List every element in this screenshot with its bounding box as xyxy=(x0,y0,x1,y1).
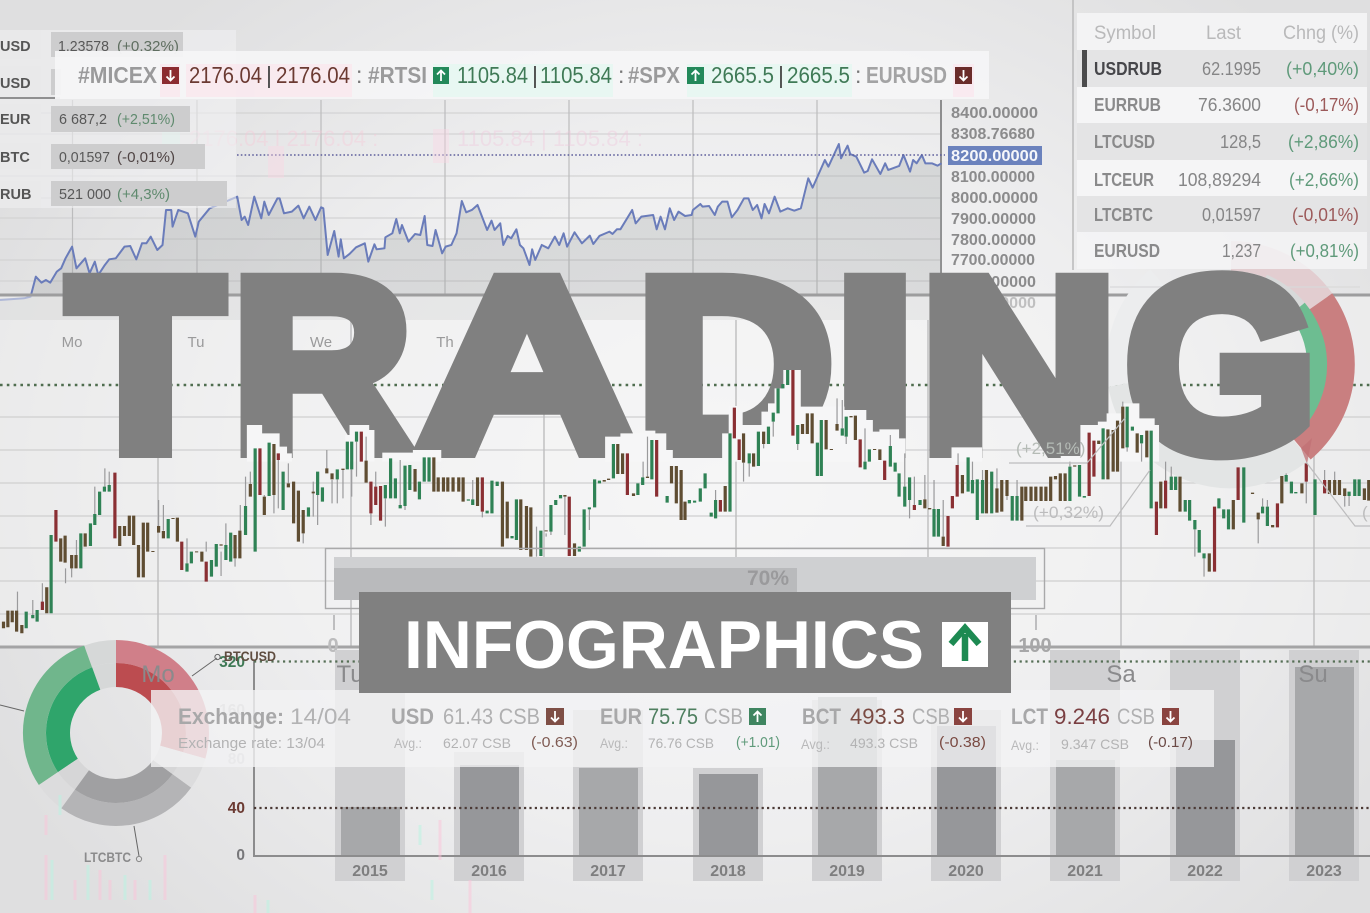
table header: Chng (%) xyxy=(1283,23,1359,44)
panel: ticker bar: | xyxy=(532,62,538,88)
day labels top chart: Mo xyxy=(62,334,82,351)
USD block: 62.07 CSB xyxy=(443,735,511,751)
panel: ticker bar: #SPX xyxy=(628,62,681,88)
panel: left currency labels: 1.23578 xyxy=(58,38,109,55)
panel: symbols table xyxy=(1073,0,1367,270)
table rows: (+2,86%) xyxy=(1288,132,1359,152)
callouts: ( xyxy=(1362,503,1368,522)
candlestick chart xyxy=(3,370,1369,633)
y axis labels top chart: 7500.00000 xyxy=(951,295,1036,312)
y axis labels top chart xyxy=(948,105,1042,312)
year labels: 2020 xyxy=(948,863,984,880)
panel: ticker bar: | xyxy=(778,62,784,88)
EUR block: 76.76 CSB xyxy=(648,735,714,751)
panel: ticker bar: : xyxy=(356,62,362,88)
LCT block: CSB xyxy=(1117,704,1155,729)
table rows: LTCBTC xyxy=(1094,205,1153,225)
year labels: 2023 xyxy=(1306,863,1342,880)
y axis labels top chart: 8400.00000 xyxy=(951,105,1038,122)
white halo behind candles xyxy=(247,370,1159,462)
ghost ticker artifacts xyxy=(162,126,643,178)
ghost ticker artifacts: 1105.84 | 1105.84 : xyxy=(457,126,643,151)
day labels lower chart: Sa xyxy=(1106,661,1136,688)
y axis labels top chart: 7900.00000 xyxy=(951,211,1036,228)
year labels: 2022 xyxy=(1187,863,1223,880)
subtitle box: INFOGRAPHICS xyxy=(359,592,1011,693)
panel: ticker bar: 2176.04 xyxy=(189,62,262,88)
progress bar: 70% xyxy=(747,567,789,590)
panel: exchange strip xyxy=(151,690,1214,767)
panel: left currency labels: USD xyxy=(0,76,31,92)
callouts xyxy=(1009,418,1370,526)
exchange heading: 14/04 xyxy=(290,704,351,729)
title: TRADING: I xyxy=(834,228,916,503)
table rows: (+2,66%) xyxy=(1289,170,1359,190)
donut chart bottom left: LTCBTC xyxy=(84,850,131,865)
y axis labels top chart: 8000.00000 xyxy=(951,190,1038,207)
table rows: LTCUSD xyxy=(1094,132,1155,152)
glitch ticks bottom left xyxy=(46,795,470,913)
panel: left currency labels: BTC xyxy=(0,150,30,166)
panel: left currency labels: (-0,01%) xyxy=(117,149,175,166)
y axis labels: 320 xyxy=(219,654,245,671)
USD block xyxy=(391,704,578,751)
BCT block: Avg.: xyxy=(801,736,830,752)
panel: ticker bar xyxy=(55,51,989,99)
panel: ticker bar: 2176.04 xyxy=(276,62,350,88)
title: TRADING: T xyxy=(68,228,223,503)
y axis labels: 80 xyxy=(228,751,245,768)
highlighted price tag: 8200.00000 xyxy=(951,148,1038,165)
icon: down arrow xyxy=(955,67,972,84)
day labels top chart xyxy=(62,334,454,351)
panel: candlestick chart grid xyxy=(0,295,1370,647)
day labels lower chart: Tu xyxy=(336,661,364,688)
day labels top chart: Tu xyxy=(188,334,204,351)
USD block: 61.43 CSB xyxy=(443,704,540,729)
BCT block: BCT xyxy=(802,704,841,729)
EUR block: EUR xyxy=(600,704,642,729)
progress bar xyxy=(326,548,1052,657)
panel: ticker bar: 2665.5 xyxy=(787,62,850,88)
EUR block: (+1.01) xyxy=(736,734,780,751)
panel: left currency labels xyxy=(0,30,236,208)
panel: ticker bar: : xyxy=(618,62,624,88)
panel: left currency labels: 521 000 xyxy=(59,186,111,203)
title: TRADING: A xyxy=(416,228,638,503)
candles left half xyxy=(3,432,681,633)
year labels: 2016 xyxy=(471,863,507,880)
red arc over G xyxy=(1301,438,1312,464)
year labels: 2017 xyxy=(590,863,626,880)
icon: up arrow xyxy=(433,67,449,84)
LCT block: 9.246 xyxy=(1054,704,1110,729)
bar chart xyxy=(219,650,1370,881)
EUR block xyxy=(600,704,780,751)
panel: ticker bar: #MICEX xyxy=(78,62,158,88)
bar columns xyxy=(335,650,1359,881)
table rows: LTCEUR xyxy=(1094,170,1154,190)
y axis labels top chart: 8308.76680 xyxy=(951,126,1035,143)
LCT block xyxy=(1011,704,1193,753)
pointers xyxy=(0,658,217,856)
year labels xyxy=(352,863,1342,880)
y axis labels: 0 xyxy=(236,847,245,864)
LCT block: 9.347 CSB xyxy=(1061,736,1129,752)
EUR block: 75.75 xyxy=(648,704,698,729)
year labels: 2018 xyxy=(710,863,746,880)
title: TRADING: G xyxy=(1125,228,1317,503)
day labels lower chart: Mo xyxy=(141,661,175,688)
table rows xyxy=(1094,59,1359,261)
table rows: 76.3600 xyxy=(1198,95,1261,115)
y axis labels xyxy=(219,654,245,864)
callouts: (+2,51%) xyxy=(1016,439,1085,458)
icon: up arrow xyxy=(687,67,704,84)
panel: ticker bar: #RTSI xyxy=(368,62,427,88)
BCT block xyxy=(801,704,986,752)
icon: up arrow xyxy=(942,622,988,667)
EUR block: CSB xyxy=(704,704,743,729)
USD block: Avg.: xyxy=(394,735,422,751)
table header: Last xyxy=(1206,23,1242,44)
price line xyxy=(0,144,942,300)
BCT block: 493.3 xyxy=(850,704,905,729)
area under price line xyxy=(0,144,942,320)
y axis labels: 40 xyxy=(228,800,245,817)
table rows: (+0,81%) xyxy=(1290,241,1359,261)
y axis labels top chart: 7700.00000 xyxy=(951,252,1035,269)
panel: ticker bar: 1105.84 xyxy=(457,62,528,88)
table rows: 108,89294 xyxy=(1178,170,1261,190)
subtitle box: INFOGRAPHICS: INFOGRAPHICS xyxy=(404,607,924,683)
day labels lower chart xyxy=(141,661,1328,688)
panel: left currency labels: EUR xyxy=(0,112,31,128)
panel: top line chart xyxy=(0,100,945,320)
year labels: 2015 xyxy=(352,863,388,880)
day labels top chart: We xyxy=(310,334,332,351)
panel: ticker bar: : xyxy=(855,62,861,88)
table rows: EURUSD xyxy=(1094,241,1160,261)
table header: Symbol xyxy=(1094,23,1156,44)
day labels top chart: Th xyxy=(436,334,454,351)
table rows: (-0,17%) xyxy=(1294,95,1359,115)
callouts: (+0,32%) xyxy=(1033,503,1104,522)
y axis labels top chart: 7800.00000 xyxy=(951,232,1036,249)
table rows: 0,01597 xyxy=(1202,205,1261,225)
panel: left currency labels: (+0.32%) xyxy=(117,38,179,55)
title: TRADING: R xyxy=(232,228,412,503)
LCT block: LCT xyxy=(1011,704,1048,729)
candles right half xyxy=(685,370,1369,577)
bars xyxy=(341,667,1354,856)
day labels lower chart: Su xyxy=(1298,661,1328,688)
panel: left currency labels: RUB xyxy=(0,187,31,203)
progress bar: 100 xyxy=(1018,635,1052,657)
EUR block: Avg.: xyxy=(600,735,628,751)
USD block: USD xyxy=(391,704,434,729)
panel: ticker bar: EURUSD xyxy=(866,62,947,88)
table rows: 128,5 xyxy=(1220,132,1261,152)
exchange heading xyxy=(178,704,351,752)
table rows: 1,237 xyxy=(1222,241,1261,261)
donut chart bottom left xyxy=(0,649,276,865)
title: TRADING: N xyxy=(920,228,1118,503)
donut chart bottom left: BTCUSD xyxy=(224,649,276,664)
title: TRADING xyxy=(68,228,1317,503)
panel: ticker bar: | xyxy=(266,62,272,88)
table rows: (-0,01%) xyxy=(1292,205,1359,225)
icon: down arrow xyxy=(162,67,179,84)
panel: left currency labels: USD xyxy=(0,39,31,55)
panel: ticker bar: 1105.84 xyxy=(540,62,612,88)
USD block: (-0.63) xyxy=(531,734,578,751)
BCT block: (-0.38) xyxy=(939,734,986,751)
donut chart top right xyxy=(1110,256,1360,473)
panel: ticker bar: 2665.5 xyxy=(711,62,774,88)
y axis labels top chart: 7600.00000 xyxy=(951,274,1036,291)
panel: left currency labels: (+2,51%) xyxy=(117,111,175,128)
panel: left currency labels: (+4,3%) xyxy=(117,186,170,203)
ghost ticker artifacts: 2176.04 | 2176.04 : xyxy=(189,126,378,151)
LCT block: Avg.: xyxy=(1011,737,1039,753)
BCT block: CSB xyxy=(912,704,950,729)
panel: left currency labels: 6 687,2 xyxy=(59,111,107,128)
title: TRADING: D xyxy=(636,228,834,503)
exchange heading: Exchange: xyxy=(178,704,284,729)
y axis labels: 160 xyxy=(219,702,245,719)
year labels: 2019 xyxy=(829,863,865,880)
table rows: 62.1995 xyxy=(1202,59,1261,79)
panel: left currency labels: 0,01597 xyxy=(59,149,110,166)
progress bar: 0 xyxy=(327,635,339,657)
year labels: 2021 xyxy=(1067,863,1103,880)
table header xyxy=(1094,23,1359,44)
LCT block: (-0.17) xyxy=(1148,734,1193,751)
BCT block: 493.3 CSB xyxy=(850,735,918,751)
exchange heading: Exchange rate: 13/04 xyxy=(178,735,325,752)
table rows: USDRUB xyxy=(1094,59,1162,79)
table rows: EURRUB xyxy=(1094,95,1161,115)
y axis labels top chart: 8100.00000 xyxy=(951,169,1035,186)
table rows: (+0,40%) xyxy=(1286,59,1359,79)
